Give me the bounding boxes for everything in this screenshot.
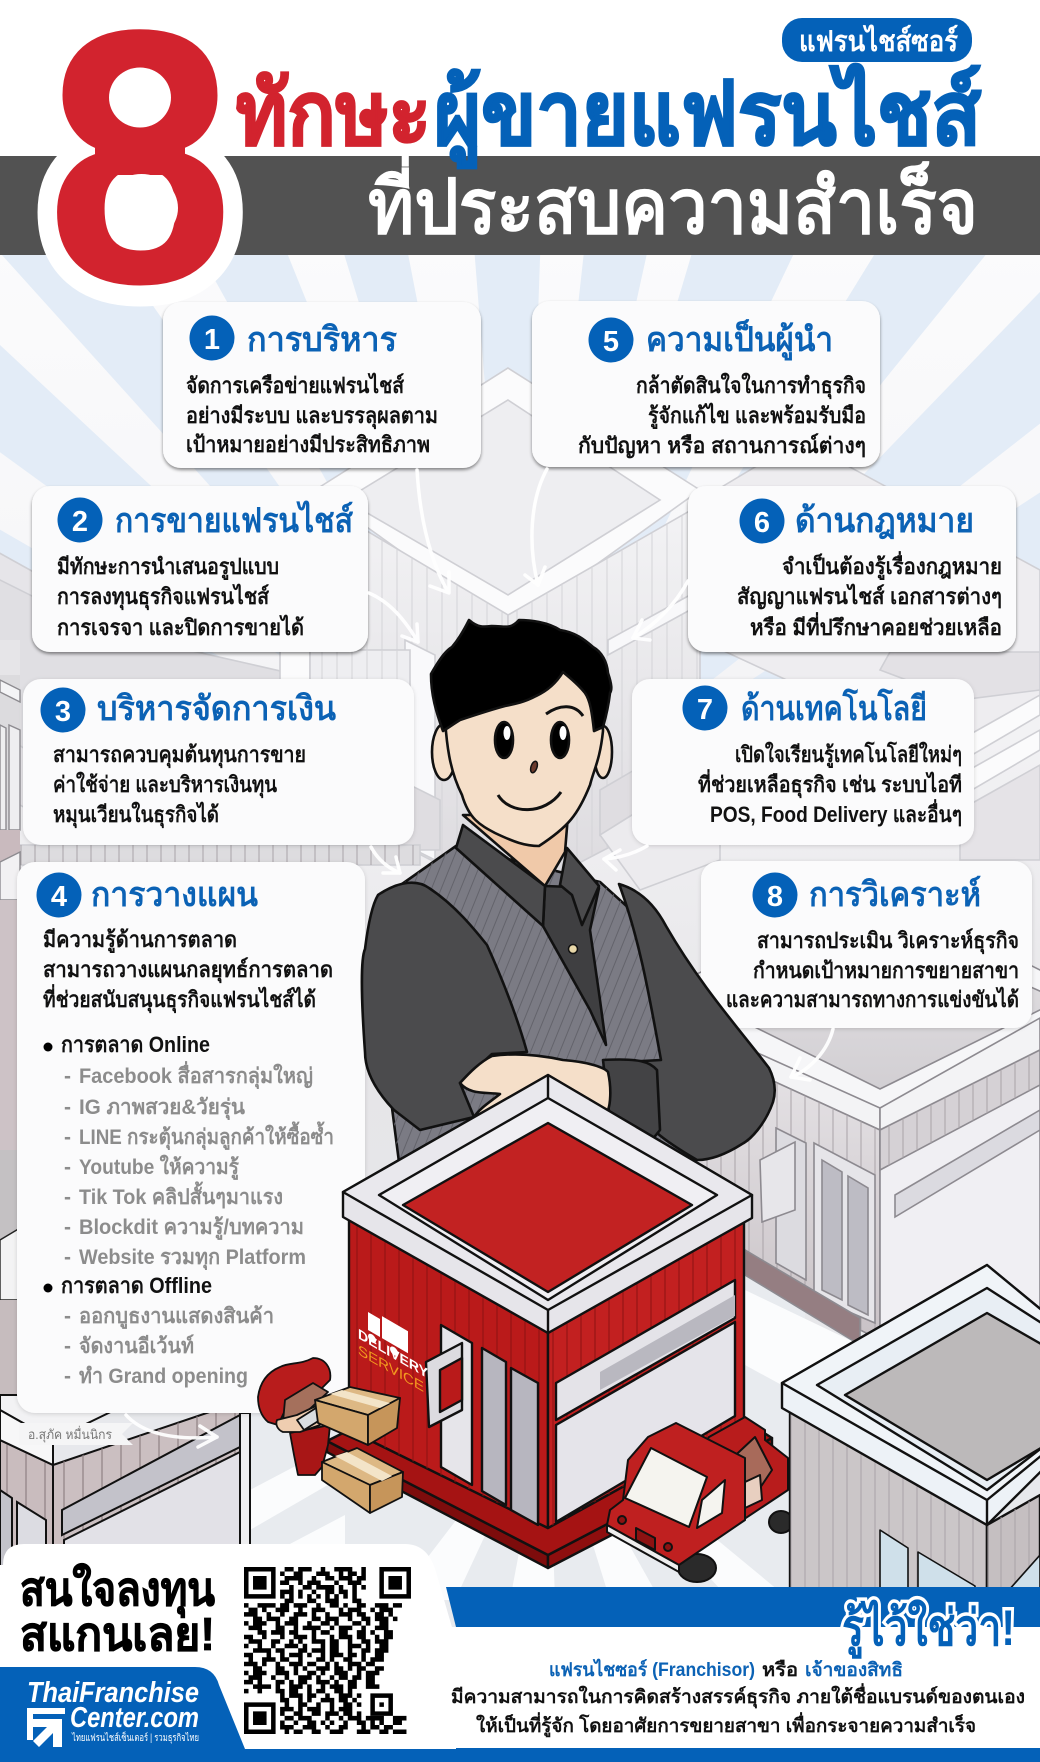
foreground door xyxy=(880,1530,1040,1600)
arrow 4 xyxy=(126,1415,217,1447)
body 6: หรือ มีที่ปรึกษาคอยช่วยเหลือ xyxy=(750,611,1002,640)
courier cap xyxy=(258,1358,330,1425)
title line 1 blue: ผู้ขายแฟรนไชส์ xyxy=(434,64,981,169)
heading 2: การขายแฟรนไชส์ xyxy=(115,500,353,540)
back building: left strip xyxy=(0,640,20,1410)
man shirt front xyxy=(543,886,606,1045)
heading 7: ด้านเทคโนโลยี xyxy=(741,688,927,728)
store door and glass xyxy=(441,1325,538,1525)
arrow 1 xyxy=(417,470,449,593)
foreground wall xyxy=(790,1410,1040,1600)
number badge 3 xyxy=(40,688,86,732)
left sliver xyxy=(0,1587,6,1667)
title line 2: ที่ประสบความสำเร็จ xyxy=(368,153,978,250)
online marketing list: - xyxy=(64,1186,71,1209)
logo text: ไทยแฟรนไชส์เซ็นเตอร์ | รวมธุรกิจไทย xyxy=(71,1730,199,1744)
man torso vest xyxy=(391,846,700,1180)
body 8 xyxy=(726,928,1019,1012)
offline marketing list: - xyxy=(64,1335,71,1358)
back building: centre xyxy=(315,368,700,900)
body 7: POS, Food Delivery และอื่นๆ xyxy=(710,798,962,827)
body 2 xyxy=(57,554,304,640)
number badge 2: 2 xyxy=(72,506,88,538)
truck grille xyxy=(618,1516,672,1551)
number badge 6 xyxy=(740,498,784,544)
arrows xyxy=(126,469,833,1447)
online marketing list: - xyxy=(64,1126,71,1149)
body 5 xyxy=(578,372,866,459)
online marketing list: IG ภาพสวย&วัยรุ่น xyxy=(79,1096,246,1121)
truck side window xyxy=(697,1480,725,1528)
store logo: SERVICE xyxy=(358,1342,424,1396)
back building: lower left xyxy=(0,1395,250,1603)
footer band xyxy=(0,1748,1040,1762)
body 4: สามารถวางแผนกลยุทธ์การตลาด xyxy=(43,957,333,984)
online marketing list: - xyxy=(64,1216,71,1239)
number badge 5 xyxy=(588,318,634,362)
panel: card 1 การบริหาร xyxy=(163,302,481,468)
heading 8: การวิเคราะห์ xyxy=(809,875,981,914)
white QR panel xyxy=(0,1544,458,1749)
online marketing list: Tik Tok คลิปสั้นๆมาแรง xyxy=(79,1181,283,1209)
body 3: หมุนเวียนในธุรกิจได้ xyxy=(53,801,219,829)
blue banner xyxy=(446,1587,1040,1627)
man left sleeve xyxy=(362,883,527,1130)
body 1: เป้าหมายอย่างมีประสิทธิภาพ xyxy=(186,432,430,457)
title line 1 red: ทักษะ xyxy=(235,64,431,163)
offline marketing list: จัดงานอีเว้นท์ xyxy=(79,1334,194,1358)
arrow 2 xyxy=(369,593,418,642)
bottom band and panel xyxy=(0,1544,1040,1762)
man eyes xyxy=(495,722,569,758)
back buildings xyxy=(0,368,1040,900)
number badge 7 xyxy=(682,686,728,730)
man mouth xyxy=(498,792,561,810)
pill badge: แฟรนไชส์ซอร์ xyxy=(799,24,958,58)
cta text: สแกนเลย! xyxy=(20,1608,215,1660)
store logo xyxy=(358,1308,428,1396)
body 6: สัญญาแฟรนไชส์ เอกสารต่างๆ xyxy=(737,583,1002,610)
foreground roof xyxy=(782,1265,1040,1525)
arrow 8 xyxy=(791,1029,833,1080)
offline marketing list xyxy=(44,1273,274,1388)
online marketing list: Youtube ให้ความรู้ xyxy=(79,1154,240,1181)
body 2: มีทักษะการนำเสนอรูปแบบ xyxy=(57,554,279,581)
online marketing list: - xyxy=(64,1246,71,1269)
panel: card 3 บริหารจัดการเงิน xyxy=(23,679,414,845)
back building: right with door xyxy=(640,890,1040,1400)
man face xyxy=(444,660,603,846)
illustration: delivery man with boxes xyxy=(258,1358,403,1513)
man ears xyxy=(432,724,612,780)
courier hair xyxy=(283,1383,328,1422)
offline marketing list: ทำ Grand opening xyxy=(79,1365,248,1388)
back building: strip above card 4 xyxy=(0,845,420,865)
header xyxy=(0,0,1040,360)
panel: card 8 การวิเคราะห์ xyxy=(701,861,1032,1028)
truck cab xyxy=(607,1423,745,1565)
store roof xyxy=(343,1075,752,1333)
online marketing list: - xyxy=(64,1156,71,1179)
logo panel xyxy=(0,1667,245,1749)
body 5: กล้าตัดสินใจในการทำธุรกิจ xyxy=(636,372,866,400)
info text: หรือ xyxy=(762,1659,798,1681)
foreground building bottom right xyxy=(782,1265,1040,1600)
store door handle xyxy=(426,1343,462,1427)
logo arrow xyxy=(27,1708,65,1747)
number badge 7: 7 xyxy=(697,694,713,726)
number badge 5: 5 xyxy=(603,326,619,358)
offline marketing list: ออกบูธงานแสดงสินค้า xyxy=(79,1304,274,1330)
dark title bar xyxy=(0,156,1040,255)
logo text: ThaiFranchise xyxy=(27,1677,199,1709)
number badge 2 xyxy=(58,498,102,542)
logo text: Center.com xyxy=(70,1702,199,1734)
courier face xyxy=(276,1405,320,1432)
body 7: ที่ช่วยเหลือธุรกิจ เช่น ระบบไอที xyxy=(698,768,962,799)
heading 4: การวางแผน xyxy=(91,876,258,914)
online marketing list: Website รวมทุก Platform xyxy=(79,1246,306,1271)
body 3: สามารถควบคุมต้นทุนการขาย xyxy=(53,742,306,769)
panel: card 2 การขายแฟรนไชส์ xyxy=(32,486,368,652)
heading 3: บริหารจัดการเงิน xyxy=(97,690,336,728)
cta text xyxy=(20,1562,215,1660)
courier body xyxy=(290,1425,330,1475)
truck bed xyxy=(690,1417,788,1555)
illustration: delivery truck xyxy=(607,1417,793,1582)
heading 5: ความเป็นผู้นำ xyxy=(646,318,833,361)
online marketing list: Facebook สื่อสารกลุ่มใหญ่ xyxy=(79,1060,313,1090)
arrow 5 xyxy=(525,469,547,585)
heading 6: ด้านกฎหมาย xyxy=(795,502,974,540)
QR code xyxy=(244,1567,411,1734)
panel: card 5 ความเป็นผู้นำ xyxy=(532,301,880,467)
arrow 6 xyxy=(633,581,688,640)
panel: card 4 การวางแผน xyxy=(17,862,365,1413)
info text: แฟรนไชซอร์ (Franchisor) xyxy=(549,1658,755,1681)
man neck xyxy=(463,815,568,886)
store right wall xyxy=(548,1222,744,1528)
number badge 4: 4 xyxy=(51,881,67,913)
truck bumper xyxy=(607,1525,679,1572)
number badge 4 xyxy=(36,872,82,918)
offline marketing list: - xyxy=(64,1365,71,1388)
arrow 7 xyxy=(604,846,647,870)
pill badge xyxy=(782,18,972,62)
back building: upper left xyxy=(0,520,410,850)
man hand xyxy=(460,1054,610,1130)
body 1: อย่างมีระบบ และบรรลุผลตาม xyxy=(186,403,438,430)
truck windshield xyxy=(625,1448,707,1527)
man button xyxy=(568,944,578,954)
number badge 8: 8 xyxy=(767,881,783,913)
store shutter xyxy=(556,1280,735,1522)
online marketing list: - xyxy=(64,1096,71,1119)
heading 1: การบริหาร xyxy=(247,321,398,359)
body 3: ค่าใช้จ่าย และบริหารเงินทุน xyxy=(53,771,277,799)
man eyebrow xyxy=(546,707,583,716)
white info area xyxy=(450,1627,1040,1749)
number badge 8 xyxy=(752,872,798,918)
panel: card 6 ด้านกฎหมาย xyxy=(688,486,1016,652)
man cuff xyxy=(603,1059,660,1160)
number badge 6: 6 xyxy=(754,507,770,539)
rear wheel xyxy=(769,1511,793,1533)
arrow 3 xyxy=(371,847,400,873)
online marketing list: LINE กระตุ้นกลุ่มลูกค้าให้ซื้อซ้ำ xyxy=(79,1121,334,1151)
body 7: เปิดใจเรียนรู้เทคโนโลยีใหม่ๆ xyxy=(735,741,962,769)
front wheel xyxy=(678,1554,716,1582)
courier mask xyxy=(297,1408,320,1430)
man collar xyxy=(456,825,599,926)
back building: upper right xyxy=(360,440,1040,890)
body 2: การเจรจา และปิดการขายได้ xyxy=(57,614,304,640)
info text: เจ้าของสิทธิ xyxy=(805,1659,903,1681)
illustration: businessman xyxy=(362,620,775,1180)
number badge 1: 1 xyxy=(204,324,220,356)
panel: card 7 ด้านเทคโนโลยี xyxy=(632,679,974,845)
online marketing list: Blockdit ความรู้/บทความ xyxy=(79,1215,304,1241)
credit ribbon: อ.สุภัค หมื่นนิกร xyxy=(28,1426,112,1443)
info text: มีความสามารถในการคิดสร้างสรรค์ธุรกิจ ภายใต้ชื่อแบรนด์ของตนเอง xyxy=(451,1683,1025,1709)
truck cargo xyxy=(725,1437,772,1508)
credit ribbon xyxy=(19,1423,133,1445)
body 6 xyxy=(737,550,1002,640)
box on floor xyxy=(322,1448,403,1513)
store base xyxy=(327,1420,772,1568)
body 5: กับปัญหา หรือ สถานการณ์ต่างๆ xyxy=(578,433,866,459)
store left wall xyxy=(349,1220,548,1528)
body 4 xyxy=(43,927,333,1014)
man hair xyxy=(431,620,611,731)
header white xyxy=(0,0,1040,156)
offline marketing list: - xyxy=(64,1305,71,1328)
illustration: red delivery store xyxy=(327,1075,772,1568)
info text xyxy=(451,1658,1025,1738)
body 4: ที่ช่วยสนับสนุนธุรกิจแฟรนไชส์ได้ xyxy=(43,983,316,1014)
body 7 xyxy=(698,741,962,827)
online marketing list: การตลาด Online xyxy=(61,1032,210,1057)
store logo: DELIVERY xyxy=(358,1326,428,1382)
body 1: จัดการเครือข่ายแฟรนไชส์ xyxy=(186,372,404,398)
box held xyxy=(315,1387,400,1445)
cta text: สนใจลงทุน xyxy=(20,1562,215,1618)
body 4: มีความรู้ด้านการตลาด xyxy=(43,927,237,954)
floor rays xyxy=(245,1280,860,1600)
logo text xyxy=(27,1677,199,1744)
body 5: รู้จักแก้ไข และพร้อมรับมือ xyxy=(648,402,866,430)
online marketing list xyxy=(44,1032,334,1271)
body 3 xyxy=(53,742,306,829)
offline marketing list: การตลาด Offline xyxy=(61,1273,212,1298)
online marketing list: - xyxy=(64,1065,71,1088)
info text: ให้เป็นที่รู้จัก โดยอาศัยการขยายสาขา เพื่อกระจายความสำเร็จ xyxy=(476,1712,976,1738)
man nose xyxy=(529,760,539,774)
body 2: การลงทุนธุรกิจแฟรนไชส์ xyxy=(57,583,270,611)
number badge 3: 3 xyxy=(55,696,71,728)
body 6: จำเป็นต้องรู้เรื่องกฎหมาย xyxy=(782,550,1002,581)
man right sleeve xyxy=(619,884,775,1160)
number badge 1 xyxy=(190,316,234,360)
body 1 xyxy=(186,372,438,457)
